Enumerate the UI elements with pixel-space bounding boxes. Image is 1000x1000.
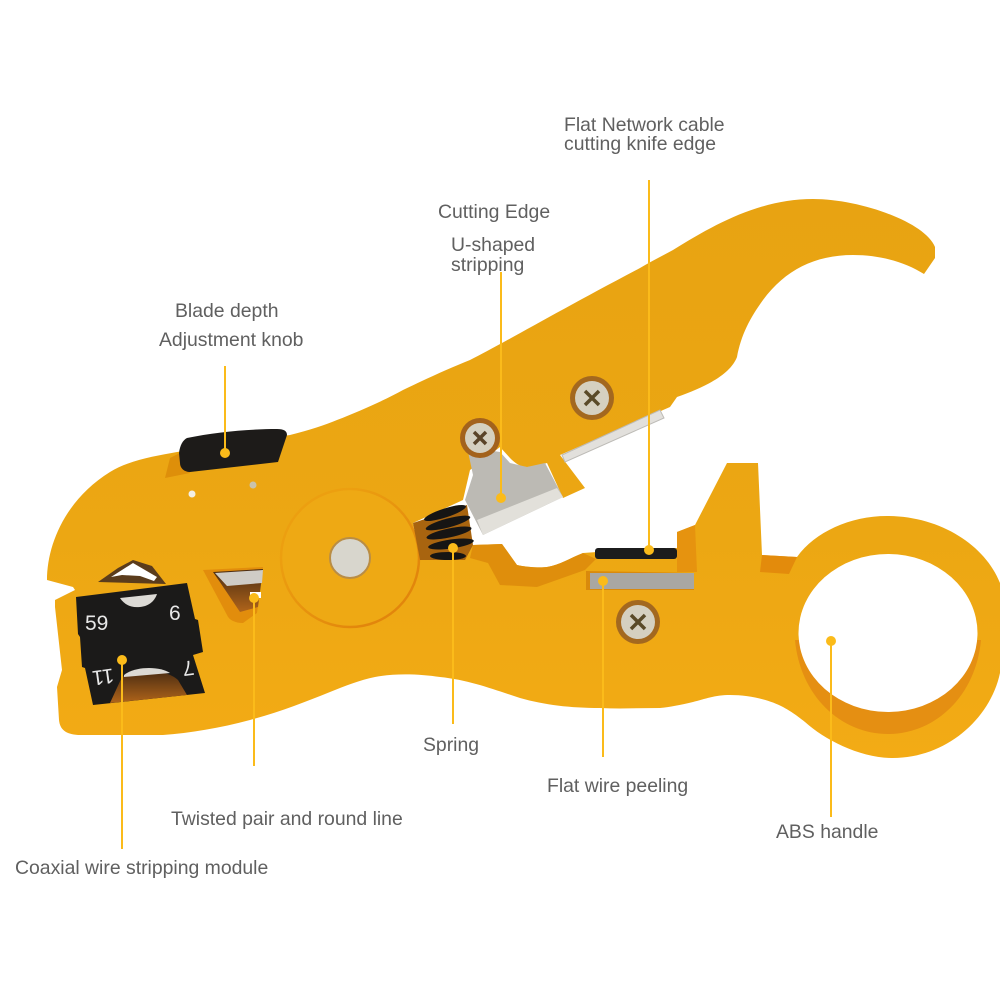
screw: upper xyxy=(570,376,614,420)
callout: abs handle: ABS handle xyxy=(776,821,878,843)
module numbers: 59 xyxy=(85,612,108,635)
rear slot shading xyxy=(760,555,797,574)
callout: twisted pair: Twisted pair and round line xyxy=(171,808,403,830)
notch opening xyxy=(111,563,157,581)
indicator dots xyxy=(188,482,256,498)
callout: abs handle xyxy=(776,636,878,843)
coaxial bottom blade xyxy=(124,668,170,677)
module numbers: 7 xyxy=(181,655,195,680)
flat cable slot xyxy=(595,548,677,559)
adjustment knob xyxy=(179,429,287,472)
twisted pair slot xyxy=(203,567,263,623)
coaxial bottom window xyxy=(110,671,187,703)
blade edge bevel xyxy=(477,488,563,535)
tower shading xyxy=(677,525,697,572)
callout: blade depth knob xyxy=(159,300,303,458)
pivot rivet xyxy=(330,538,370,578)
handle ring hole xyxy=(798,554,978,712)
knob step shadow xyxy=(165,452,190,478)
screw: lower xyxy=(616,600,660,644)
tool body xyxy=(47,199,1000,758)
callout: coaxial module: Coaxial wire stripping module xyxy=(15,857,268,879)
twisted pair opening xyxy=(250,592,261,598)
notch above coaxial module xyxy=(98,560,166,584)
callout: coaxial module xyxy=(15,655,268,879)
spring xyxy=(413,502,474,560)
callout: u-shaped stripping: U-shaped xyxy=(451,234,535,256)
callout: u-shaped stripping: stripping xyxy=(451,254,524,276)
pivot disc xyxy=(281,489,419,627)
handle ring inner shade xyxy=(795,640,981,734)
callout: spring xyxy=(423,543,479,756)
callout: flat wire peeling: Flat wire peeling xyxy=(547,775,688,797)
twisted pair slot interior xyxy=(213,569,263,612)
callout: flat network cable knife edge xyxy=(564,114,725,555)
flat wire blade xyxy=(586,571,694,590)
callout: twisted pair xyxy=(171,593,403,830)
callout: flat network cable knife edge: Flat Network cable xyxy=(564,114,725,136)
twisted pair blade xyxy=(215,570,263,586)
module numbers: 6 xyxy=(169,602,181,625)
callout: flat network cable knife edge: cutting knife edge xyxy=(564,133,716,155)
callout: cutting edge: Cutting Edge xyxy=(438,201,550,223)
coaxial top slot xyxy=(120,594,157,607)
coaxial module xyxy=(76,583,205,705)
tool: wire stripper xyxy=(47,199,1000,758)
callout: u-shaped stripping xyxy=(451,234,535,503)
blade: u-shaped xyxy=(465,447,563,535)
module numbers xyxy=(85,602,195,689)
module numbers: 11 xyxy=(91,663,115,689)
callout: blade depth knob: Blade depth xyxy=(175,300,279,322)
callout: flat wire peeling xyxy=(547,576,688,797)
channel shading xyxy=(470,544,596,587)
blade: upper flat xyxy=(562,410,664,462)
screw: blade xyxy=(460,418,500,458)
callout: blade depth knob: Adjustment knob xyxy=(159,329,303,351)
callout: spring: Spring xyxy=(423,734,479,756)
